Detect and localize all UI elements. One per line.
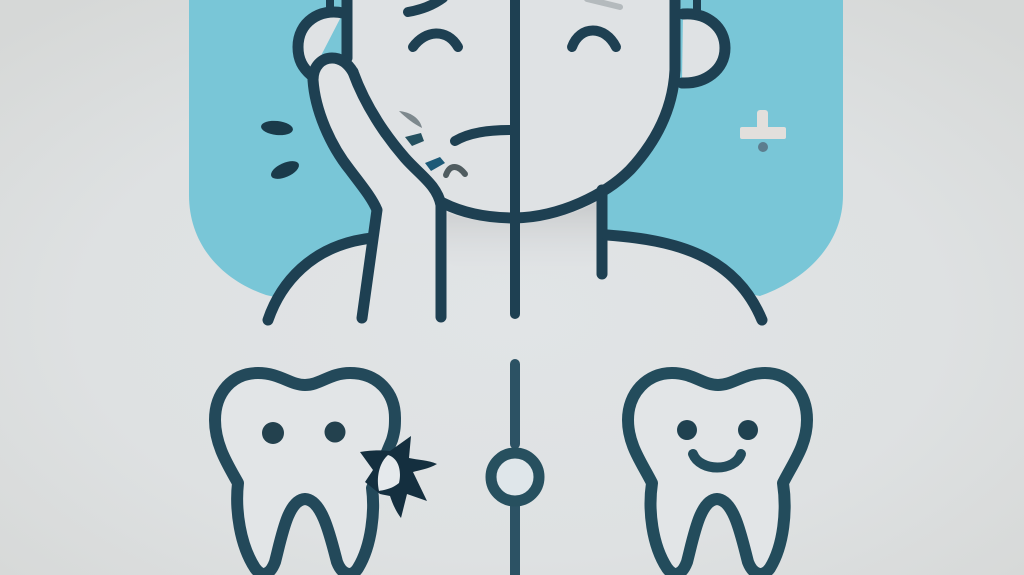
- pain marks: [260, 119, 302, 182]
- left tooth eye: [262, 422, 284, 444]
- mouth: [455, 130, 510, 141]
- left ear: [298, 12, 343, 75]
- hand right edge: [353, 72, 441, 317]
- right tooth eye: [324, 422, 346, 442]
- hair stubs: [330, 0, 697, 12]
- neck shadow: [447, 200, 598, 279]
- icon: aching tooth: [215, 373, 395, 574]
- right ear: [682, 14, 725, 83]
- circle node: [491, 453, 539, 501]
- icon: happy tooth: [628, 373, 807, 574]
- panel: blue backdrop: [189, 0, 843, 297]
- right brow: [587, 0, 620, 7]
- left head edge: [342, 0, 352, 58]
- icon: pain burst: [360, 436, 437, 518]
- lower divider bottom: [510, 506, 520, 575]
- left brow: [408, 0, 443, 12]
- head fill: [347, 0, 675, 218]
- icon: sparkle plus: [740, 110, 786, 152]
- hand fill: [313, 58, 441, 243]
- right eye: [572, 30, 616, 47]
- left tooth eye: [677, 420, 697, 440]
- left eye: [413, 33, 458, 47]
- left shoulder: [268, 238, 372, 320]
- tooth smile: [693, 454, 741, 468]
- center divider: [510, 0, 520, 314]
- head outline: [443, 0, 675, 218]
- cheek pain marks: [399, 111, 465, 175]
- right tooth eye: [738, 420, 758, 440]
- figure: head and body: [268, 0, 762, 575]
- right neck: [596, 190, 608, 274]
- right shoulder: [607, 235, 762, 320]
- hand left edge: [313, 58, 377, 318]
- lower divider top: [510, 364, 520, 444]
